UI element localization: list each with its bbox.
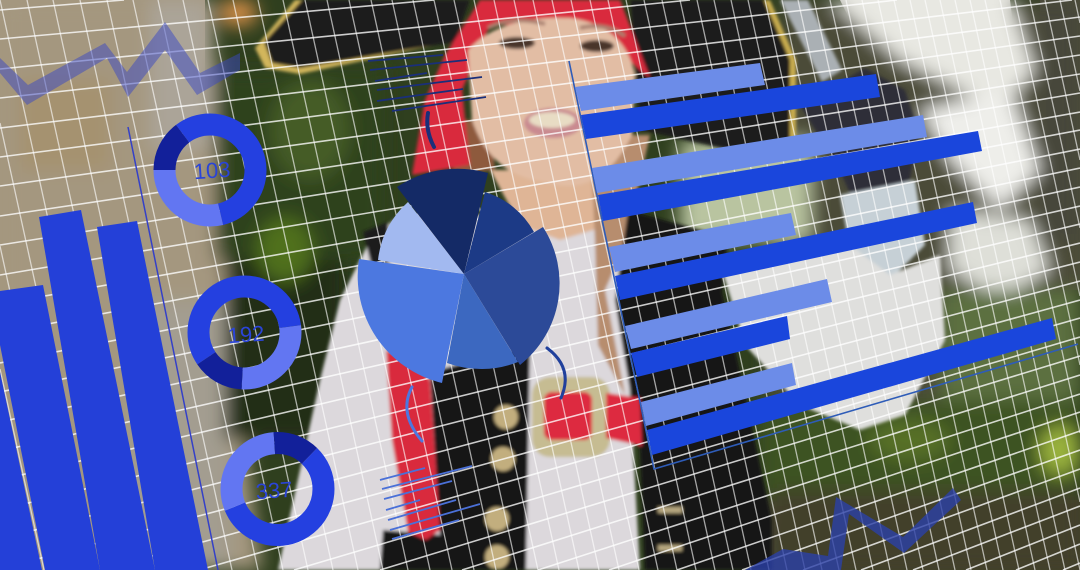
donut chart: 103 bbox=[164, 124, 256, 216]
bar chart: horizontal slanted bars bbox=[569, 61, 1078, 469]
donut chart: 192 bbox=[198, 286, 290, 378]
bandana bbox=[412, 0, 650, 175]
vests bbox=[363, 222, 390, 268]
bar chart: left slanted columns bbox=[0, 127, 218, 570]
belt buckle bbox=[532, 377, 610, 457]
hat bbox=[255, 0, 470, 74]
right sleeve bbox=[722, 245, 945, 430]
line chart: top-left zigzag bbox=[0, 22, 240, 105]
sword and glove bbox=[780, 0, 842, 82]
red sash bbox=[386, 350, 440, 540]
value: 192 bbox=[227, 321, 265, 348]
value: 103 bbox=[193, 157, 231, 184]
pie chart: exploded wedges bbox=[358, 169, 560, 383]
shirt bbox=[278, 215, 640, 570]
list lines: bottom bbox=[380, 466, 480, 539]
list lines: top bbox=[368, 55, 486, 111]
buttons bbox=[494, 405, 518, 429]
background photo: pirate child figure bbox=[255, 0, 945, 570]
line chart: bottom-right zigzag bbox=[745, 488, 961, 570]
eyes, brows and mouth bbox=[488, 20, 545, 28]
axis line bbox=[128, 127, 218, 570]
value: 337 bbox=[255, 477, 293, 504]
hair bbox=[590, 135, 650, 395]
neck bbox=[490, 170, 620, 240]
chart axes bbox=[569, 61, 1078, 469]
small arcs bbox=[407, 113, 565, 441]
face bbox=[468, 18, 635, 186]
donut chart: 337 bbox=[232, 443, 324, 535]
